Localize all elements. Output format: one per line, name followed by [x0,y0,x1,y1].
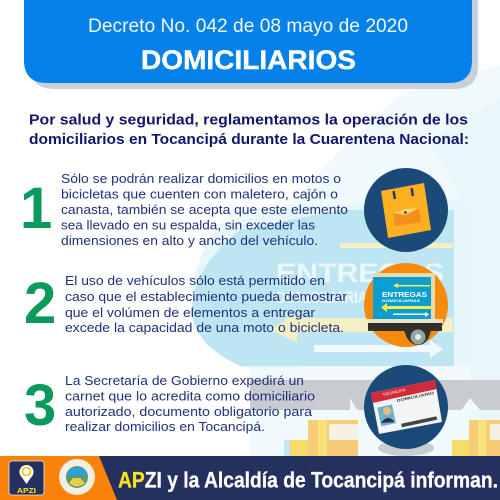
rule 3 text [65,373,315,434]
intro text [29,112,469,148]
icon: ID card [364,365,448,456]
background illustration: delivery truck scene: ENTREGAS [276,258,444,288]
rule 1 text: sea llevado en su espalda, sin exceder las [61,218,315,232]
rule 2 text: El uso de vehículos sólo está permitido en [65,273,325,288]
footer bar [0,456,500,500]
icon: delivery bag [364,168,448,252]
rule 2 text: que el volúmen de elementos a entregar [65,305,316,320]
background illustration: delivery truck scene: DOMICILIARIAS [276,288,376,307]
icon: delivery truck [364,263,448,347]
background illustration: delivery truck scene [191,65,500,456]
rule 2 text [65,273,348,335]
APZI logo [9,461,44,495]
rule 1 text: bicicletas que cuenten con maletero, cajón o [61,186,338,202]
orange logo area [0,456,117,500]
rule 1 text: Sólo se podrán realizar domicilios en motos o [61,171,341,186]
number 2: 2 [24,271,56,336]
icon: ID card: DOMICILIARIO [396,390,434,403]
number 1: 1 [20,176,52,241]
title: DOMICILIARIOS [141,45,356,75]
rule 2 text: caso que el establecimiento pueda demostrar [65,289,348,304]
icon: delivery truck: ENTREGAS [382,292,427,299]
rule 3 text: realizar domicilios en Tocancipá. [65,419,265,434]
intro text: Por salud y seguridad, reglamentamos la operación de los [29,112,468,128]
intro text: domiciliarios en Tocancipá durante la Cuarentena Nacional: [29,131,469,148]
municipal seal [59,459,95,495]
APZI logo: APZI [17,486,36,495]
rule 3 text: La Secretaría de Gobierno expedirá un [65,373,304,388]
number 3: 3 [24,373,56,438]
rule 3 text: autorizado, documento obligatorio para [65,404,313,419]
icon: delivery truck: DOMICILIARIAS [382,299,421,303]
icon: ID card: TOCANCIPÁ [382,387,406,397]
decree subtitle: Decreto No. 042 de 08 mayo de 2020 [88,15,408,37]
rule 1 text [61,171,348,248]
rule 3 text: carnet que lo acredita como domiciliario [65,388,315,404]
rule 1 text: canasta, también se acepta que este elemento [61,202,348,217]
rule 1 text: dimensiones en alto y ancho del vehículo. [61,233,318,248]
rule 2 text: excede la capacidad de una moto o bicicleta. [65,320,344,335]
header banner [24,0,478,89]
